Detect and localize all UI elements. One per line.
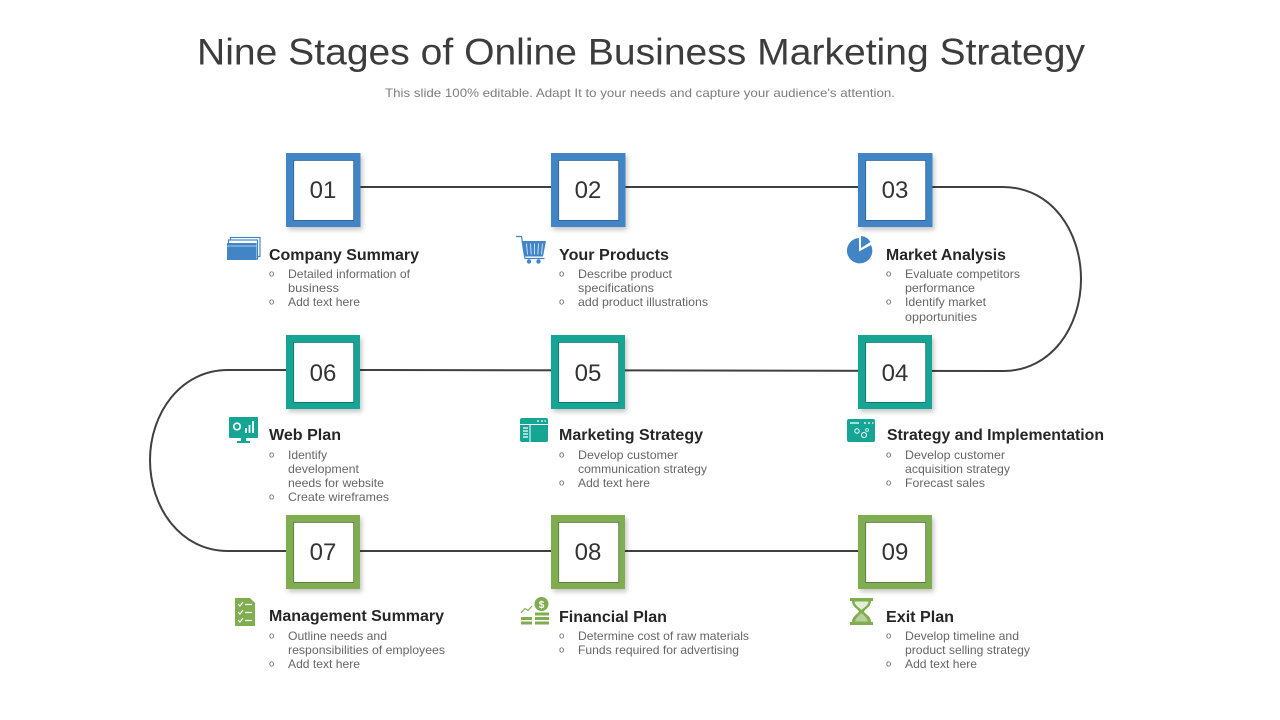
stage 05: [515, 335, 707, 490]
stage 02: [516, 153, 708, 309]
details: financial plan: [559, 629, 749, 657]
number box 08: [551, 515, 625, 589]
details: marketing strategy: o: [559, 450, 564, 460]
details: strategy and implementation: acquisition strategy: [905, 462, 1010, 476]
details: financial plan: Funds required for advertising: [578, 643, 739, 657]
details: market analysis: [886, 267, 1020, 324]
number box 04: [858, 335, 932, 409]
details: your products: Describe product: [578, 267, 673, 281]
details: web plan: o: [269, 450, 274, 460]
details: marketing strategy: communication strategy: [578, 462, 707, 476]
details: exit plan: o: [886, 630, 891, 642]
number box 09: 09: [882, 539, 908, 566]
details: exit plan: o: [886, 658, 891, 670]
details: strategy and implementation: [886, 448, 1010, 490]
heading: web plan: Web Plan: [269, 427, 341, 444]
heading: market analysis: Market Analysis: [886, 247, 1006, 264]
details: web plan: Create wireframes: [288, 490, 389, 504]
details: exit plan: [886, 629, 1030, 671]
stage 03: [842, 153, 1020, 324]
number box 03: [858, 153, 932, 227]
details: exit plan: product selling strategy: [905, 643, 1030, 657]
stage 06: [225, 335, 389, 504]
number box 06: 06: [310, 360, 336, 387]
number box 05: 05: [575, 360, 601, 387]
details: market analysis: o: [886, 268, 891, 280]
details: your products: specifications: [578, 281, 654, 295]
details: your products: [559, 267, 708, 309]
stage 07: [225, 515, 445, 671]
number box 01: [286, 153, 360, 227]
stage 04: [843, 335, 1104, 490]
details: management summary: Outline needs and: [288, 629, 387, 643]
number box 07: 07: [310, 539, 336, 566]
details: web plan: Identify: [288, 448, 327, 462]
details: market analysis: opportunities: [905, 310, 977, 324]
heading: marketing strategy: Marketing Strategy: [559, 427, 703, 444]
details: web plan: [269, 448, 389, 504]
details: strategy and implementation: o: [886, 450, 891, 460]
details: management summary: Add text here: [288, 657, 360, 671]
heading: financial plan: Financial Plan: [559, 609, 667, 626]
icon: browser windows: [227, 238, 260, 260]
details: management summary: [269, 629, 445, 671]
number box 03: 03: [882, 177, 908, 204]
details: company summary: [269, 267, 411, 309]
details: marketing strategy: [559, 448, 707, 490]
details: market analysis: Evaluate competitors: [905, 267, 1020, 281]
details: financial plan: o: [559, 644, 564, 656]
details: market analysis: performance: [905, 281, 975, 295]
details: company summary: o: [269, 296, 274, 308]
details: marketing strategy: o: [559, 478, 564, 488]
icon: layout window: [520, 418, 548, 442]
details: market analysis: Identify market: [905, 295, 987, 309]
details: web plan: development: [288, 462, 360, 476]
details: company summary: Detailed information of: [288, 267, 411, 281]
details: company summary: o: [269, 268, 274, 280]
details: financial plan: Determine cost of raw materials: [578, 629, 749, 643]
details: exit plan: Develop timeline and: [905, 629, 1019, 643]
icon: hourglass: [850, 598, 873, 625]
icon: coins and growth: $: [539, 600, 545, 611]
details: financial plan: o: [559, 630, 564, 642]
icon: checklist document: [235, 598, 255, 626]
stage 01: [225, 153, 419, 309]
details: strategy and implementation: o: [886, 478, 891, 488]
number box 02: 02: [575, 177, 601, 204]
heading: management summary: Management Summary: [269, 608, 444, 625]
connector path: [150, 187, 1081, 551]
details: company summary: Add text here: [288, 295, 360, 309]
icon: shopping cart: [516, 236, 546, 264]
heading: company summary: Company Summary: [269, 247, 419, 264]
number box 04: 04: [882, 360, 908, 387]
number box 09: [858, 515, 932, 589]
icon: coins and growth: [521, 597, 549, 624]
details: strategy and implementation: Forecast sales: [905, 476, 985, 490]
icon: settings window: [847, 419, 875, 442]
details: web plan: needs for website: [288, 476, 384, 490]
details: company summary: business: [288, 281, 339, 295]
details: management summary: o: [269, 658, 274, 670]
details: exit plan: Add text here: [905, 657, 977, 671]
number box 05: [551, 335, 625, 409]
details: market analysis: o: [886, 296, 891, 308]
details: marketing strategy: Develop customer: [578, 448, 678, 462]
number box 07: [286, 515, 360, 589]
number box 02: [551, 153, 626, 227]
details: management summary: responsibilities of employees: [288, 643, 445, 657]
details: your products: add product illustrations: [578, 295, 708, 309]
details: management summary: o: [269, 630, 274, 642]
icon: monitor with chart: [229, 417, 258, 443]
subtitle: This slide 100% editable. Adapt It to your needs and capture your audience's attention.: [385, 86, 895, 100]
heading: strategy and implementation: Strategy and Implementation: [887, 427, 1104, 444]
heading: exit plan: Exit Plan: [886, 609, 954, 626]
details: strategy and implementation: Develop customer: [905, 448, 1005, 462]
icon: pie chart: [847, 236, 872, 263]
details: marketing strategy: Add text here: [578, 476, 650, 490]
details: your products: o: [559, 296, 564, 308]
stage 08: [515, 515, 749, 657]
heading: your products: Your Products: [559, 247, 669, 264]
details: your products: o: [559, 268, 564, 280]
details: web plan: o: [269, 492, 274, 502]
number box 01: 01: [310, 177, 336, 204]
stage 09: [843, 515, 1030, 671]
title: Nine Stages of Online Business Marketing Strategy: [197, 32, 1086, 72]
number box 06: [286, 335, 360, 409]
number box 08: 08: [575, 539, 601, 566]
